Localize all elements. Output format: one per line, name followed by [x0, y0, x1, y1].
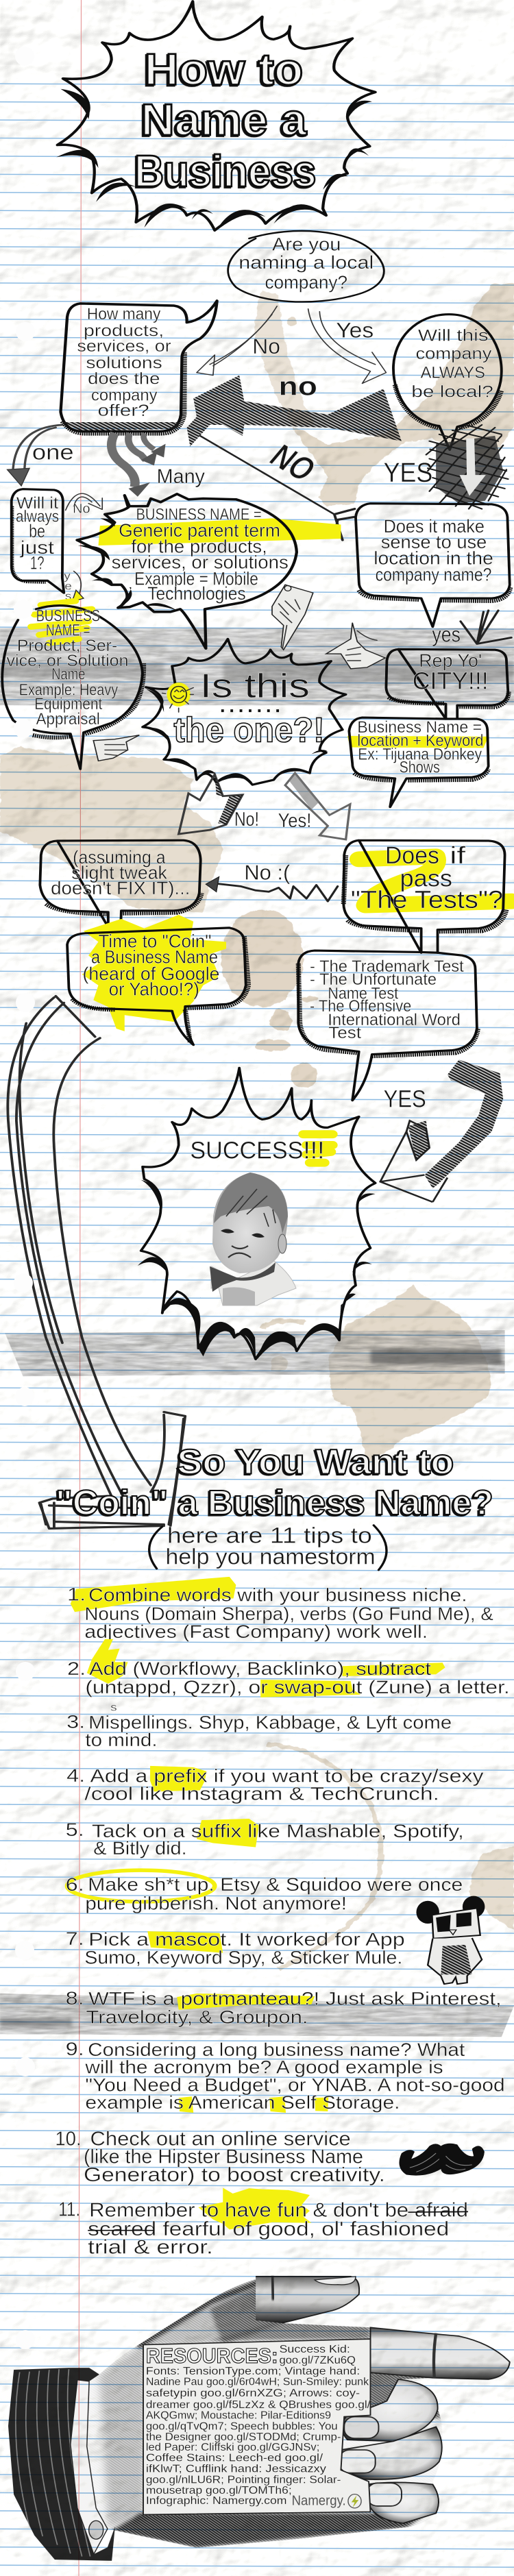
question: how many products: company — [91, 385, 158, 404]
bubble: the tests list: - The Unfortunate — [310, 969, 437, 988]
question: location: sense to use — [381, 532, 487, 552]
resources card: safetypin goo.gl/6rnXZG; Arrows: coy- — [146, 2387, 360, 2399]
tip 11: trial & error. — [88, 2236, 213, 2258]
long down arrow — [8, 996, 185, 1528]
face features — [221, 1229, 265, 1238]
tip 3: s — [110, 1701, 117, 1713]
tip 1: adjectives (Fast Company) work well. — [84, 1621, 428, 1642]
question: always just one — [12, 489, 64, 593]
resources card: mousetrap goo.gl/TOMTh6; — [146, 2484, 292, 2497]
question: local company: naming a local — [238, 253, 374, 273]
resources card: goo.gl/qTvQm7; Speech bubbles: You — [146, 2420, 338, 2432]
arrow: yes outline — [278, 773, 350, 839]
bubble: rep yo city: Rep Yo' — [419, 651, 482, 671]
bubble: product name: BUSINESS — [36, 606, 100, 625]
index finger — [370, 2327, 510, 2379]
subheading in parentheses: help you namestorm — [166, 1544, 376, 1569]
head — [212, 1173, 288, 1273]
bubble: product name: Name — [51, 664, 85, 683]
tip 5: 5. — [66, 1819, 84, 1840]
bubble: assuming a slight tweak: doesn't FIX IT)... — [51, 879, 190, 899]
arrow: yes outline: Yes! — [278, 809, 311, 831]
bubble: the tests list: - The Offensive — [310, 996, 411, 1015]
bubble: generic parent term: Generic parent term — [119, 520, 280, 541]
tip 11 — [58, 2187, 468, 2258]
tip 5 — [66, 1819, 464, 1859]
tip 7: Pick a mascot. It worked for App — [88, 1930, 405, 1950]
tip 6: 6. — [66, 1874, 84, 1895]
binder holes — [14, 47, 35, 2349]
bubble: location plus keyword: Business Name = — [357, 717, 482, 736]
tip 2: (untappd, Qzzr), or swap-out (Zune) a letter. — [85, 1677, 510, 1697]
tip 2 — [67, 1639, 510, 1697]
question: how many products: does the — [88, 369, 160, 388]
title burst — [56, 1, 376, 230]
section: coin heading and tips 1-2 — [56, 1443, 510, 1697]
tip 9: Considering a long business name? What — [88, 2040, 465, 2060]
question: how many products: offer? — [98, 400, 149, 419]
question: always just one: be — [29, 522, 45, 541]
tip 6 — [66, 1870, 463, 1914]
bubble: time to coin: or Yahoo!?) — [109, 979, 199, 1000]
arrows: many: Many — [157, 465, 205, 488]
resources card: Success Kid: — [280, 2343, 350, 2355]
resources card: dreamer goo.gl/f5LzXz & QBrushes goo.gl/ — [146, 2399, 371, 2411]
question: how many products: products, — [84, 321, 164, 340]
resources card — [143, 2339, 371, 2515]
arrow: yes — [432, 611, 511, 647]
stain: cup ring — [267, 1744, 514, 1969]
bubble: assuming a slight tweak: (assuming a — [73, 847, 166, 868]
fingernails — [315, 2277, 402, 2506]
stain: lower left — [0, 748, 223, 913]
title text: Name a — [141, 95, 307, 145]
success burst: SUCCESS — [190, 1137, 303, 1164]
resources card: AKQGmw; Moustache: Pilar-Editions9 — [146, 2409, 331, 2421]
tip 1: 1. — [67, 1584, 86, 1605]
bubble: product name: Appraisal — [36, 709, 100, 728]
arrow: no sad zigzag: No :( — [244, 861, 291, 885]
tip 3: to mind. — [85, 1730, 158, 1750]
tip 8: Travelocity, & Groupon. — [86, 2007, 308, 2028]
arrow: yes: Yes — [336, 318, 374, 342]
icon: panda mascot — [416, 1896, 485, 1984]
tip 4: Add a prefix if you want to be crazy/sexy — [90, 1766, 484, 1787]
tip 10: 10. — [55, 2128, 82, 2150]
question: location — [356, 504, 511, 627]
arrow: no loop: No — [73, 500, 90, 516]
arrow: no: No — [252, 334, 280, 358]
section: title and first questions — [56, 1, 502, 450]
bubble: generic parent term: BUSINESS NAME = — [136, 504, 262, 524]
question: always local: Will this — [418, 326, 489, 345]
arrow: yes down: e — [64, 580, 72, 592]
bubble: location plus keyword — [347, 717, 489, 807]
tip 6: Make sh*t up. Etsy & Squidoo were once — [88, 1874, 463, 1895]
burst: is this the one: Is this — [200, 666, 310, 704]
title text: How to — [144, 45, 303, 95]
baby photo — [210, 1173, 296, 1305]
resources card: led Paper: Cliffski goo.gl/GGJNSv; — [146, 2441, 319, 2453]
question: always local: be local? — [411, 382, 493, 401]
stain: upper right — [255, 283, 514, 506]
tip 5: Tack on a suffix like Mashable, Spotify, — [92, 1821, 464, 1841]
hair — [214, 1173, 288, 1234]
icon: hand pointing down — [272, 585, 313, 650]
subheading in parentheses: here are 11 tips to — [167, 1523, 372, 1548]
thumb — [256, 2277, 359, 2323]
tip 5: & Bitly did. — [93, 1839, 187, 1859]
arrows: many — [112, 433, 205, 497]
bubble: time to coin — [67, 915, 249, 1045]
icon: smiley sun — [162, 683, 193, 712]
section: decisions — [2, 376, 511, 839]
question: always just one: just — [20, 537, 55, 558]
grey band 2 — [5, 1330, 505, 1376]
arrow: yes scribble: YES — [384, 1085, 426, 1113]
tip 4: 4. — [66, 1765, 85, 1786]
bib and shirt — [211, 1261, 296, 1305]
question: always local: company — [415, 343, 492, 363]
success burst: !!! — [303, 1137, 325, 1164]
resources card: goo.gl/7ZKu6Q — [280, 2354, 356, 2366]
tip 1 — [67, 1577, 493, 1642]
bubble: location plus keyword: Shows — [400, 757, 440, 776]
resources card: ifKlwT; Cufflink hand: Jessicazxy — [146, 2462, 327, 2475]
title text — [134, 45, 317, 196]
bubble: generic parent term: services, or solutions — [112, 552, 289, 573]
icon: hand pointing left — [326, 623, 385, 669]
tip 10: Generator) to boost creativity. — [84, 2164, 385, 2185]
bubble: rep yo city — [386, 649, 509, 719]
tip 4 — [66, 1765, 484, 1804]
bubble: does it pass the tests: if — [450, 842, 466, 869]
icon: moustache — [399, 2144, 485, 2176]
bubble: does it pass the tests — [343, 840, 511, 953]
arrow: no sad zigzag — [206, 861, 338, 901]
bubble: product name: Product, Ser- — [17, 636, 117, 655]
arrow: no outline: No! — [234, 808, 259, 830]
resources card: RESOURCES: — [146, 2344, 278, 2368]
question: location: location in the — [374, 548, 493, 569]
question: how many products: How many — [87, 304, 161, 323]
tip 10 — [55, 2128, 385, 2185]
arrow: no to generic — [200, 436, 355, 540]
arrow: no outline — [179, 774, 259, 834]
bubble: the tests list: Name Test — [328, 983, 398, 1003]
question: location: Does it make — [384, 517, 485, 537]
illustration: pointing hand — [8, 2268, 514, 2561]
success burst — [138, 1068, 376, 1359]
arrow: yes: yes — [432, 622, 461, 647]
tip 3: Mispellings. Shyp, Kabbage, & Lyft come — [88, 1713, 452, 1733]
bubble: does it pass the tests: pass — [400, 866, 452, 892]
tip 8: WTF is a portmanteau?! Just ask Pinterest, — [88, 1989, 502, 2009]
question: always local — [393, 315, 502, 450]
big scribbled arrow — [62, 376, 402, 447]
logo: Namergy: Namergy. — [292, 2492, 346, 2508]
grey band 1 — [0, 628, 514, 705]
subtitle heading — [56, 1443, 493, 1522]
tip 9: example is American Self Storage. — [85, 2093, 400, 2113]
bubble: assuming a slight tweak: slight tweak — [71, 863, 167, 883]
tip 9 — [66, 2039, 505, 2113]
section: tips 10-11 and resources — [8, 2128, 514, 2561]
tip 8 — [66, 1988, 502, 2028]
coffee stains and grey bands — [0, 283, 514, 2037]
label: yes with exclamation scribble — [384, 425, 508, 509]
bubble: does it pass the tests: Does — [385, 842, 439, 869]
subheading in parentheses — [149, 1523, 387, 1570]
tip 3: 3. — [66, 1712, 85, 1732]
tip 7: Sumo, Keyword Spy, & Sticker Mule. — [84, 1948, 402, 1968]
tip 10: Check out an online service — [90, 2128, 351, 2150]
resources card: Coffee Stains: Leech-ed goo.gl/ — [146, 2452, 323, 2464]
tip 9: 9. — [66, 2039, 84, 2059]
tip 11: Remember to have fun & don't be afraid — [89, 2199, 468, 2221]
arrow: yes — [308, 309, 386, 383]
question: always local: ALWAYS — [421, 363, 485, 382]
resources card: Fonts: TensionType.com; Vintage hand: — [146, 2365, 360, 2377]
arrow: yes down: y — [64, 569, 71, 582]
tip 7 — [66, 1928, 405, 1968]
question: local company: company? — [265, 273, 347, 293]
bubble: time to coin: a Business Name — [91, 947, 218, 968]
bubble: the tests list: International Word — [328, 1009, 461, 1029]
title text: Business — [134, 146, 317, 196]
stain: large right splat — [262, 1286, 491, 1464]
burst: is this the one — [143, 639, 346, 785]
arrow: yes scribble — [380, 1059, 503, 1202]
label: no: no — [279, 371, 317, 401]
arrow: one: one — [32, 441, 74, 465]
grey band 3 — [0, 1994, 514, 2037]
question: local company: Are you — [272, 234, 341, 255]
arrow: no loop — [66, 493, 102, 516]
bubble: the tests list: Test — [328, 1022, 362, 1042]
bubble: the tests list: - The Trademark Test — [310, 956, 464, 975]
tip 11: 11. — [58, 2198, 80, 2220]
bubble: rep yo city: CITY!!! — [413, 667, 489, 695]
arrow: one — [8, 425, 74, 486]
section: tips 3-9 — [66, 1701, 505, 2113]
tip 8: 8. — [66, 1988, 84, 2009]
question: local company — [228, 231, 384, 302]
burst: is this the one: the one?! — [173, 711, 325, 750]
tip 4: /cool like Instagram & TechCrunch. — [84, 1784, 439, 1804]
arrow: yes down: s — [65, 590, 72, 602]
bubble: generic parent term: for the products, — [131, 537, 267, 557]
question: always just one: always — [16, 506, 59, 526]
tip 11: scared fearful of good, ol' fashioned — [88, 2218, 449, 2240]
bubble: generic parent term — [77, 494, 341, 648]
question: how many products — [60, 301, 217, 434]
resources card: Nadine Pau goo.gl/6r04wH; Sun-Smiley: punk — [146, 2375, 369, 2388]
resources card: goo.gl/nlLU6R; Pointing finger: Solar- — [146, 2473, 341, 2486]
bubble: generic parent term: Example = Mobile — [134, 569, 258, 589]
bubble: product name: vice, or Solution — [7, 650, 128, 670]
tip 6: pure gibberish. Not anymore! — [85, 1893, 347, 1914]
question: how many products: services, or — [77, 336, 171, 356]
bubble: time to coin: Time to "Coin" — [98, 931, 212, 952]
tip 1: Combine words with your business niche. — [88, 1585, 467, 1606]
arrow: yes down — [64, 569, 84, 602]
cuff — [8, 2368, 115, 2561]
resources card: Infographic: Namergy.com — [146, 2494, 287, 2507]
tip 9: will the acronym be? A good example is — [84, 2057, 443, 2078]
bubble: product name: Example: Heavy — [19, 680, 118, 699]
subtitle heading: So You Want to — [177, 1443, 454, 1481]
arrow: no — [197, 306, 280, 376]
question: always just one: Will it — [16, 493, 59, 512]
palm — [88, 2275, 443, 2548]
stain: middle splat — [221, 909, 318, 1088]
tip 2: 2. — [67, 1659, 86, 1679]
bubble: product name — [2, 601, 144, 769]
arrow: no to generic: NO — [262, 438, 323, 489]
tip 3 — [66, 1701, 452, 1750]
bubble: product name: NAME = — [46, 620, 90, 639]
bubble: the tests list — [298, 950, 478, 1101]
bubble: assuming a slight tweak — [40, 840, 201, 927]
question: always just one: 1? — [30, 553, 45, 574]
red margin line — [79, 0, 81, 2576]
bubble: product name: Equipment — [34, 694, 103, 713]
label: yes with exclamation scribble: YES — [384, 458, 432, 488]
resources card: the Designer goo.gl/STODMd; Crump- — [146, 2431, 341, 2443]
tip 10: (like the Hipster Business Name — [84, 2146, 363, 2168]
bubble: time to coin: (heard of Google — [83, 964, 219, 984]
question: how many products: solutions — [86, 353, 162, 372]
icon: hand pointing right — [93, 735, 139, 761]
curled fingers — [342, 2379, 438, 2441]
tip 7: 7. — [66, 1928, 84, 1949]
tip 2: Add (Workflowy, Backlinko), subtract — [89, 1659, 432, 1679]
bubble: generic parent term: Technologies — [147, 584, 246, 604]
section: coin or pass the tests — [8, 840, 511, 1528]
